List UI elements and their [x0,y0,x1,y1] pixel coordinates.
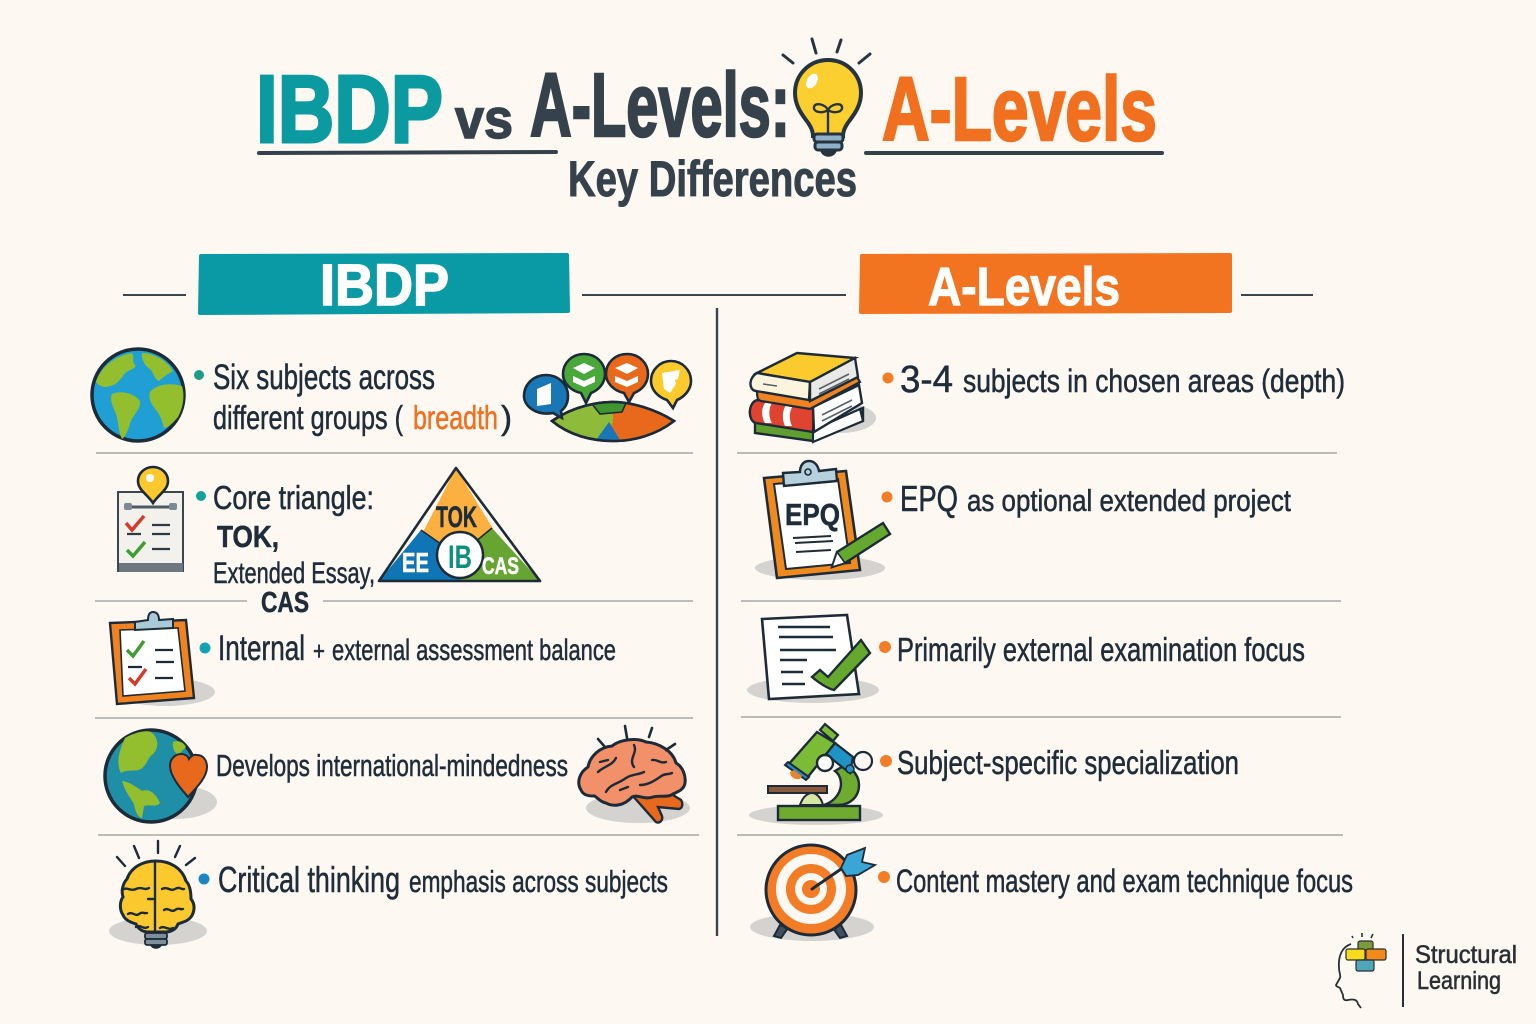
text block: different groups ( [213,399,403,436]
subtitle: Key Differences [568,151,857,207]
bullet [198,874,210,884]
text block: 3-4 [900,359,953,401]
icon: EPQ clipboard with pencil [755,461,890,580]
icon: core triangle diagram: EE [402,547,429,578]
text block [218,859,668,900]
bullet [196,491,206,501]
title: A-Levels [882,60,1157,160]
logo: Structural Learning: Structural [1415,941,1517,969]
icon: brain bulb [109,841,207,949]
IBDP row 3: assessment [110,612,616,706]
text block: Develops international-mindedness [216,748,568,783]
A-Levels row 3: external examination [747,615,1305,703]
bullet [200,642,210,654]
bullet [879,641,891,653]
icon: core triangle diagram: IB [448,539,472,575]
text block: Internal [218,629,305,668]
icon: brain [579,726,690,823]
panel header: IBDP [200,253,568,318]
text block: TOK, [217,519,279,554]
icon: orange clipboard [110,612,215,706]
icon: globe [92,349,184,441]
icon: core triangle diagram [379,468,540,582]
bullet [880,755,892,767]
A-Levels row 1: subjects [750,353,1345,442]
text block [900,359,1345,401]
text block: Core triangle: [213,479,374,516]
IBDP row 4: international-mindedness [105,726,690,823]
icon: subject speech bubbles [524,354,691,441]
title [256,56,1162,163]
text block: as optional extended project [967,483,1291,518]
text block: Subject-specific specialization [897,744,1239,781]
IBDP row 2: core triangle [118,467,540,619]
icon: checklist with pin [118,467,183,572]
text block: subjects in chosen areas (depth) [963,363,1345,399]
text block: external assessment balance [332,634,616,667]
text block: CAS [261,587,309,619]
bullet [882,372,894,384]
text block: Extended Essay, [213,557,375,590]
A-Levels row 4: specialization [749,724,1239,825]
icon: globe with heart [105,730,217,822]
text block [900,478,1291,519]
text block: emphasis across subjects [409,864,668,899]
icon: paper with check mark [747,615,879,703]
A-Levels row 5: content mastery [750,845,1353,941]
text block: ) [501,399,512,436]
title: IBDP [256,56,443,163]
bullet [194,370,204,380]
bullet [882,492,892,502]
text block [213,358,512,436]
text block [213,479,375,619]
text block [218,629,616,668]
panel header: A-Levels [861,255,1230,317]
title: vs [455,87,513,150]
text block: Critical thinking [218,859,400,900]
text block: Primarily external examination focus [897,631,1305,668]
icon: title light bulb [783,39,870,157]
panel header: IBDP: IBDP [320,253,449,318]
icon: EPQ clipboard with pencil: EPQ [785,497,840,532]
logo: Structural Learning [1336,933,1517,1008]
icon: core triangle diagram: CAS [482,553,519,580]
text block: Content mastery and exam technique focus [896,863,1353,899]
icon: stack of books [750,353,876,442]
text block: EPQ [900,478,958,519]
IBDP row 1: six subjects [92,349,691,441]
text block: breadth [413,399,498,436]
icon: microscope [749,724,883,825]
bullet [878,871,890,883]
title: A-Levels: [530,56,790,156]
icon: head with blocks [1336,933,1386,1008]
text block: + [313,636,325,666]
IBDP row 5: critical thinking [109,841,668,949]
A-Levels row 2: EPQ [755,461,1291,580]
panel header: A-Levels: A-Levels [928,257,1120,317]
icon: target with arrow [750,845,875,941]
text block: Six subjects across [213,358,435,397]
icon: core triangle diagram: TOK [436,501,477,534]
logo: Structural Learning: Learning [1417,967,1501,995]
